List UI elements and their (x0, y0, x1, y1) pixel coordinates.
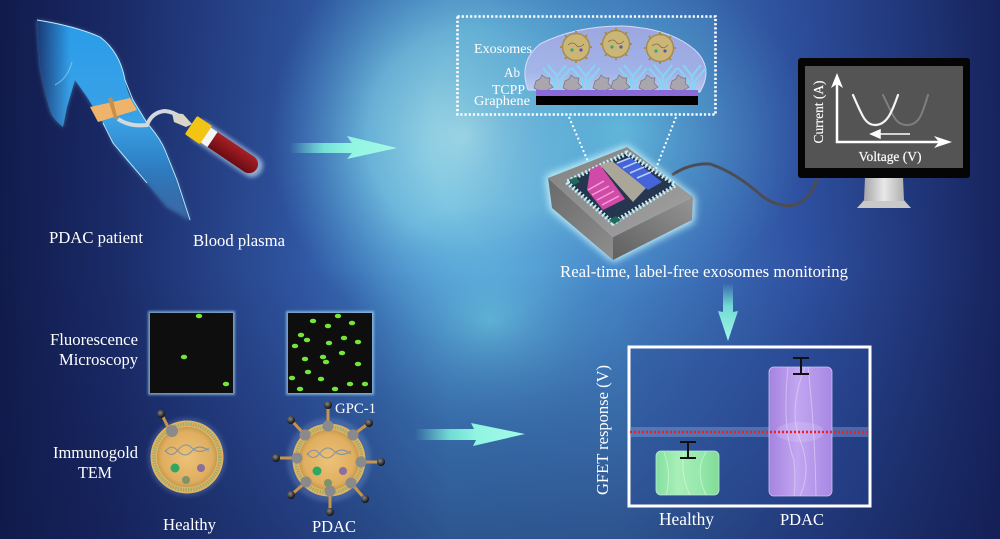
threshold line (630, 431, 868, 433)
label: Ab: Ab (504, 66, 520, 81)
antibodies (543, 65, 706, 90)
error bar: Healthy (680, 442, 696, 458)
chip pins (567, 153, 675, 223)
label: Graphene: Graphene (474, 94, 530, 109)
chart frame (629, 347, 870, 506)
liquid droplet (525, 26, 706, 92)
arrow: blood to chip (290, 136, 397, 159)
illustration: PDAC exosome (272, 401, 385, 516)
shift arrow (871, 130, 910, 138)
graphene bar (536, 96, 698, 105)
bar chart: GFET response (629, 347, 870, 506)
label: Blood plasma: Blood plasma (193, 231, 286, 250)
threshold glow (630, 427, 868, 437)
label: GFET response axis: GFET response (V) (593, 365, 612, 495)
label: Exosomes: Exosomes (474, 42, 532, 57)
label: PDAC (chart): PDAC (780, 510, 824, 529)
bar: Healthy (656, 451, 719, 495)
monitor bezel (798, 58, 970, 178)
label: Voltage (V): Voltage (V) (858, 149, 922, 164)
panel: healthy fluorescence image (148, 311, 235, 395)
gray centre (600, 161, 646, 202)
label: Real-time monitoring caption: Real-time, label-free exosomes monitoring (560, 262, 848, 281)
axes (837, 80, 945, 142)
label: PDAC (exosome): PDAC (312, 517, 356, 536)
label: Current (A): Current (A) (812, 80, 827, 144)
IV curves (853, 95, 928, 125)
tourniquet band (90, 98, 137, 122)
label: PDAC patient: PDAC patient (49, 228, 143, 247)
label: Fluorescence Microscopy: Microscopy (59, 350, 139, 369)
arrow: chip to bar chart (718, 283, 738, 341)
illustration: healthy exosome (148, 410, 226, 496)
label: Immunogold TEM: Immunogold (53, 443, 139, 462)
label: Fluorescence Microscopy: Fluorescence (50, 330, 138, 349)
corner pads (569, 177, 621, 224)
cable: chip to monitor (672, 164, 817, 206)
illustration: patient leg with tourniquet (37, 20, 190, 220)
exosomes (560, 28, 676, 64)
label: Immunogold TEM: TEM (78, 463, 112, 482)
TCPP molecules (534, 75, 689, 91)
purple layer (536, 90, 698, 96)
error bar: PDAC (793, 358, 809, 374)
illustration: GFET chip (546, 145, 695, 262)
label: Healthy (exosome): Healthy (163, 515, 217, 534)
illustration: computer monitor (798, 58, 970, 208)
monitor screen (805, 66, 963, 168)
label: Healthy (chart): Healthy (659, 509, 714, 529)
illustration: tube and blood collection vial (118, 111, 267, 181)
dotted connector lines (569, 117, 676, 171)
pink electrodes (587, 165, 625, 210)
arrow: samples to bar chart (415, 423, 525, 446)
bar: PDAC (769, 367, 832, 496)
label: TCPP: TCPP (492, 83, 525, 98)
blue electrodes (615, 157, 662, 190)
inset: sensor interface (458, 16, 716, 114)
label: GPC-1: GPC-1 (335, 401, 376, 417)
monitor stand (857, 178, 911, 208)
panel: PDAC fluorescence image (286, 311, 374, 395)
